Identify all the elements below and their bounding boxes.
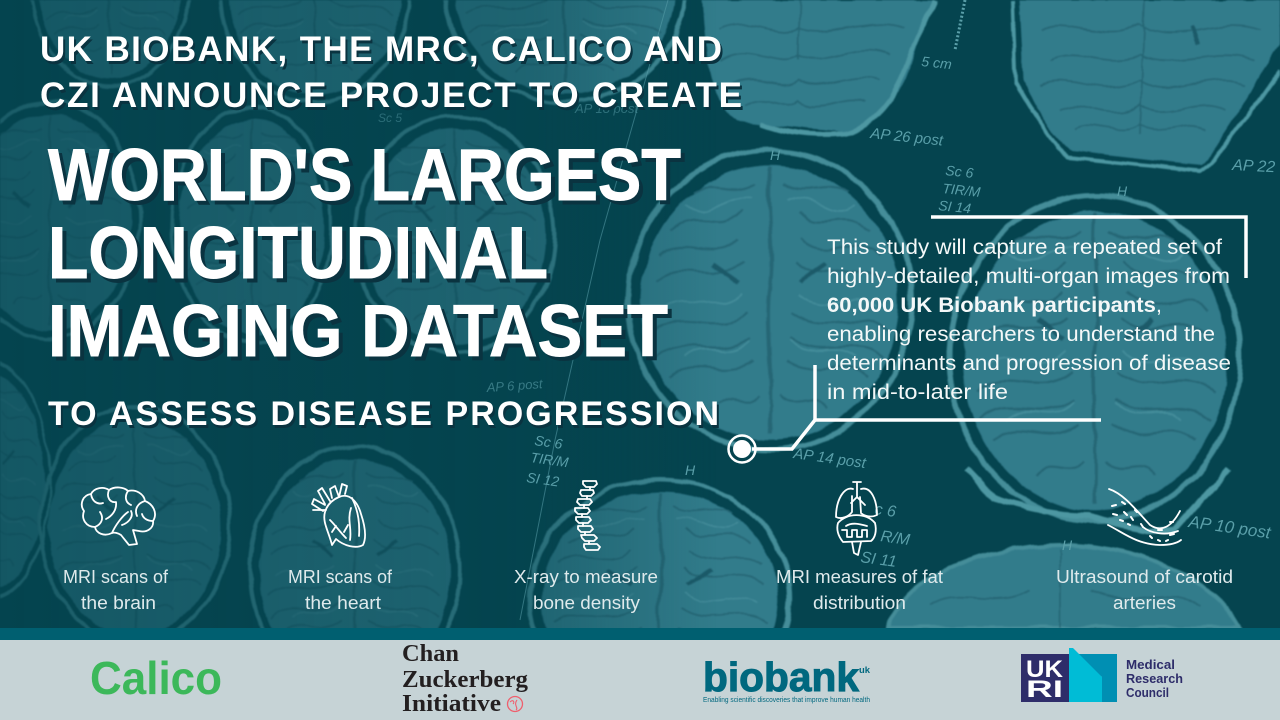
title: IMAGING DATASET xyxy=(48,291,668,372)
scan annotations: SI 12 xyxy=(526,469,560,490)
logo: UK Biobank: uk xyxy=(859,665,871,676)
scan annotations: AP 14 post xyxy=(791,445,868,472)
scan annotations: AP 26 post xyxy=(869,125,945,150)
label: arteries xyxy=(1113,592,1176,613)
label: the heart xyxy=(305,592,381,613)
callout text: This study will capture a repeated set of xyxy=(827,235,1222,259)
item: fat distribution xyxy=(776,482,943,613)
logo: UKRI Medical Research Council: RI xyxy=(1026,676,1063,703)
logo: UKRI Medical Research Council: Research xyxy=(1126,672,1183,686)
scan annotations: TIR/M xyxy=(530,449,570,470)
top-right cerebellum brain xyxy=(1020,0,1280,165)
subheading: TO ASSESS DISEASE PROGRESSION xyxy=(48,395,719,433)
scan annotations: AP 18 post xyxy=(574,101,640,116)
icon: heart xyxy=(312,484,365,547)
label xyxy=(63,566,169,613)
scan annotations: H xyxy=(685,462,696,478)
icon: brain xyxy=(82,487,155,545)
label: MRI scans of xyxy=(63,566,169,587)
logo: Chan Zuckerberg Initiative: Initiative xyxy=(402,691,501,717)
item: brain MRI xyxy=(63,487,169,613)
scan annotations: Sc 5 xyxy=(378,111,402,125)
label: X-ray to measure xyxy=(514,566,658,587)
label xyxy=(288,566,393,613)
label: the brain xyxy=(81,592,156,613)
scan annotations: c 6 xyxy=(873,501,897,521)
logo: UKRI Medical Research Council: UK xyxy=(1026,656,1064,683)
callout text xyxy=(827,235,1231,404)
callout: study description xyxy=(728,217,1246,462)
logo: UKRI Medical Research Council: Council xyxy=(1126,686,1169,700)
lower-right brain crown xyxy=(888,545,1240,628)
scan ruler lines xyxy=(520,0,965,620)
icon: organs xyxy=(836,482,877,555)
scan annotations: R/M xyxy=(879,528,912,549)
scan annotations: H xyxy=(1117,183,1128,199)
scan annotations: H xyxy=(770,147,781,163)
label: bone density xyxy=(533,592,641,613)
heading: intro lines xyxy=(40,30,742,115)
scan annotations: H xyxy=(1062,537,1073,553)
logo: Calico: Calico xyxy=(90,652,222,704)
logo: UK Biobank: biobank xyxy=(703,654,859,700)
label: Ultrasound of carotid xyxy=(1056,566,1233,587)
logo: UKRI Medical Research Council xyxy=(1021,648,1183,703)
icon: spine xyxy=(575,481,600,550)
heading: intro lines: CZI ANNOUNCE PROJECT TO CREATE xyxy=(40,76,742,115)
scan annotations: SI 11 xyxy=(859,549,898,571)
bright skull arc under right brain xyxy=(966,468,1228,531)
item: bone density xyxy=(514,481,658,613)
callout frame and connector xyxy=(728,217,1246,462)
logo: UK Biobank: Enabling scientific discoveries that improve human health xyxy=(703,697,870,704)
label: MRI measures of fat xyxy=(776,566,943,587)
scan annotations: Sc 6 xyxy=(534,432,564,452)
label xyxy=(514,566,658,613)
label: distribution xyxy=(813,592,906,613)
title: WORLD'S LARGEST xyxy=(48,135,681,216)
callout text: highly-detailed, multi-organ images from xyxy=(827,264,1230,288)
title: LONGITUDINAL xyxy=(48,213,548,294)
logo: Chan Zuckerberg Initiative xyxy=(402,641,528,717)
callout text: enabling researchers to understand the xyxy=(827,322,1215,346)
scan annotations: SI 14 xyxy=(938,197,972,216)
callout text: determinants and progression of disease xyxy=(827,351,1231,375)
callout text: 60,000 UK Biobank participants , xyxy=(827,293,1162,317)
label: MRI scans of xyxy=(288,566,393,587)
scan annotations: AP 22 xyxy=(1231,157,1276,176)
logo: Chan Zuckerberg Initiative: Chan xyxy=(402,641,459,667)
title xyxy=(48,135,681,372)
callout text: in mid-to-later life xyxy=(827,380,1008,404)
logo: UKRI Medical Research Council: Medical xyxy=(1126,658,1175,672)
scan annotations xyxy=(378,53,1276,571)
label xyxy=(1056,566,1233,613)
footer panel: partner logos xyxy=(0,640,1280,720)
scan annotations: Sc 6 xyxy=(945,162,974,181)
logo: Chan Zuckerberg Initiative: Zuckerberg xyxy=(402,667,528,693)
label xyxy=(776,566,943,613)
footer band xyxy=(0,628,1280,640)
heading: intro lines: UK BIOBANK, THE MRC, CALICO AND xyxy=(40,30,722,69)
top-middle cerebellum brain xyxy=(703,0,935,133)
item: heart MRI xyxy=(288,484,393,613)
item: carotid ultrasound xyxy=(1056,489,1233,613)
scan annotations: 5 cm xyxy=(921,53,953,72)
scan annotations: AP 6 post xyxy=(485,376,544,395)
scan annotations: AP 10 post xyxy=(1186,512,1273,543)
scan annotations: TIR/M xyxy=(942,180,982,200)
icon: artery xyxy=(1108,489,1181,545)
